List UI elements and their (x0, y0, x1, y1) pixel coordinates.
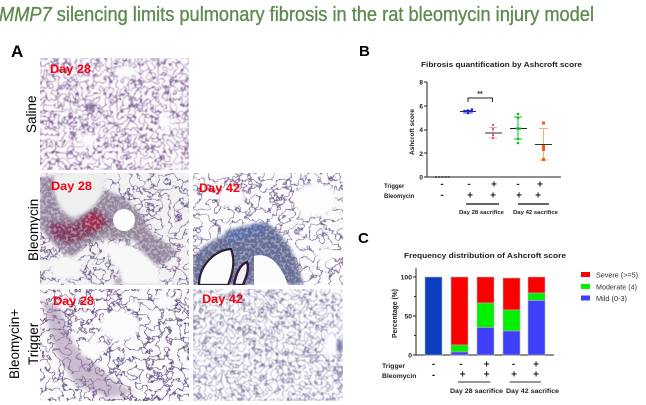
plus minus markers: + (535, 190, 541, 202)
axes (424, 82, 561, 177)
y tick labels (419, 80, 423, 182)
series: day 42 bleomycin plus trigger (535, 122, 552, 161)
plus minus markers: + (460, 370, 466, 380)
series: day 28 bleomycin plus trigger (485, 124, 502, 139)
micrograph: bleomycin + trigger day 42 (193, 289, 343, 401)
bar: day 28 bleomycin plus trigger (477, 277, 494, 355)
plus minus markers: + (467, 190, 473, 202)
y tick labels: 0 (408, 352, 412, 360)
y tick labels: 2 (419, 151, 423, 158)
plus minus markers: + (533, 370, 539, 380)
panel: A histology (7, 42, 343, 401)
bar: day 42 bleomycin plus trigger (528, 277, 545, 355)
plus minus markers: - (432, 359, 435, 370)
legend: mild: Mild (0-3) (596, 294, 627, 303)
micrograph: bleomycin day 28 (40, 173, 189, 285)
axes (413, 268, 554, 355)
micrograph: saline day 28 (40, 58, 189, 170)
plus minus markers: - (440, 190, 444, 201)
label: Day 28: Day 28 (53, 294, 94, 308)
bar: day 28 bleomycin (451, 277, 468, 355)
x axis group labels: Bleomycin (384, 194, 415, 200)
plus minus markers: + (511, 370, 517, 380)
x axis group labels: Bleomycin (382, 373, 416, 380)
baseline control dots (435, 176, 451, 178)
panel label: A: A (11, 42, 23, 61)
series: day 28 bleomycin (460, 108, 476, 114)
plus minus markers (432, 359, 539, 381)
sacrifice lines and labels: Day 28 sacrifice (450, 388, 503, 395)
y tick labels: 50 (404, 314, 412, 320)
significance bracket (468, 91, 492, 102)
label: Day 42: Day 42 (199, 181, 240, 195)
bar: day 42 bleomycin (503, 278, 520, 355)
y tick labels: 4 (419, 127, 423, 134)
x axis group labels: Trigger (384, 184, 405, 190)
plus minus markers: - (440, 179, 444, 190)
panel label: B: B (359, 43, 370, 60)
y tick labels (401, 274, 412, 360)
legend (581, 270, 638, 303)
plus minus markers: + (491, 180, 497, 190)
panel label: C: C (358, 230, 369, 247)
plus minus markers: - (467, 179, 471, 190)
plus minus markers: + (484, 360, 490, 370)
y axis label: Percentage (%) (392, 289, 399, 338)
row label: Saline: Saline (24, 95, 39, 133)
y tick labels: 8 (419, 80, 423, 86)
x axis group labels (384, 184, 415, 200)
row label: Bleomycin+ Trigger: Bleomycin+ (7, 309, 22, 379)
legend: moderate: Moderate (4) (596, 282, 637, 292)
significance bracket: ** (477, 91, 483, 98)
x axis group labels (382, 363, 416, 380)
micrograph: bleomycin day 42 (193, 173, 343, 285)
plus minus markers: - (459, 359, 463, 370)
title: MMP7 silencing limits pulmonary fibrosis in the rat bleomycin injury model (0, 4, 594, 26)
bar: control (425, 277, 442, 355)
micrograph: bleomycin + trigger day 28 (40, 289, 189, 401)
label: Day 42: Day 42 (202, 292, 243, 306)
sacrifice bars and labels (459, 203, 559, 216)
y axis label: Ashcroft score (409, 109, 416, 155)
row label: Bleomycin: Bleomycin (26, 199, 41, 261)
plus minus markers: - (512, 359, 515, 370)
plus minus markers: + (533, 360, 539, 370)
panel: B Ashcroft score scatter chart (359, 43, 582, 216)
chart title: Frequency distribution of Ashcroft score (404, 251, 566, 260)
plus minus markers (440, 179, 543, 202)
sacrifice lines and labels: Day 42 sacrifice (506, 388, 559, 395)
y tick labels: 0 (419, 174, 423, 182)
plus minus markers: - (432, 370, 435, 381)
sacrifice bars and labels: Day 28 sacrifice (459, 210, 505, 216)
y tick labels: 6 (419, 104, 423, 110)
sacrifice lines and labels (450, 382, 559, 395)
bars (425, 277, 545, 355)
label: Day 28: Day 28 (51, 179, 92, 193)
series: day 42 bleomycin (510, 113, 527, 144)
plus minus markers: - (516, 179, 520, 190)
sacrifice bars and labels: Day 42 sacrifice (513, 210, 559, 216)
legend: severe: Severe (>=5) (596, 270, 638, 280)
plus minus markers: + (490, 190, 496, 202)
label: Day 28: Day 28 (50, 62, 91, 76)
y tick labels: 100 (401, 274, 412, 282)
x axis group labels: Trigger (382, 363, 405, 370)
row label: Trigger second line: Trigger (26, 322, 41, 365)
chart title: Fibrosis quantification by Ashcroft score (421, 60, 582, 69)
plus minus markers: + (537, 180, 543, 190)
panel: C frequency distribution stacked bars (358, 230, 638, 395)
plus minus markers: + (484, 370, 490, 380)
plus minus markers: + (516, 190, 522, 202)
